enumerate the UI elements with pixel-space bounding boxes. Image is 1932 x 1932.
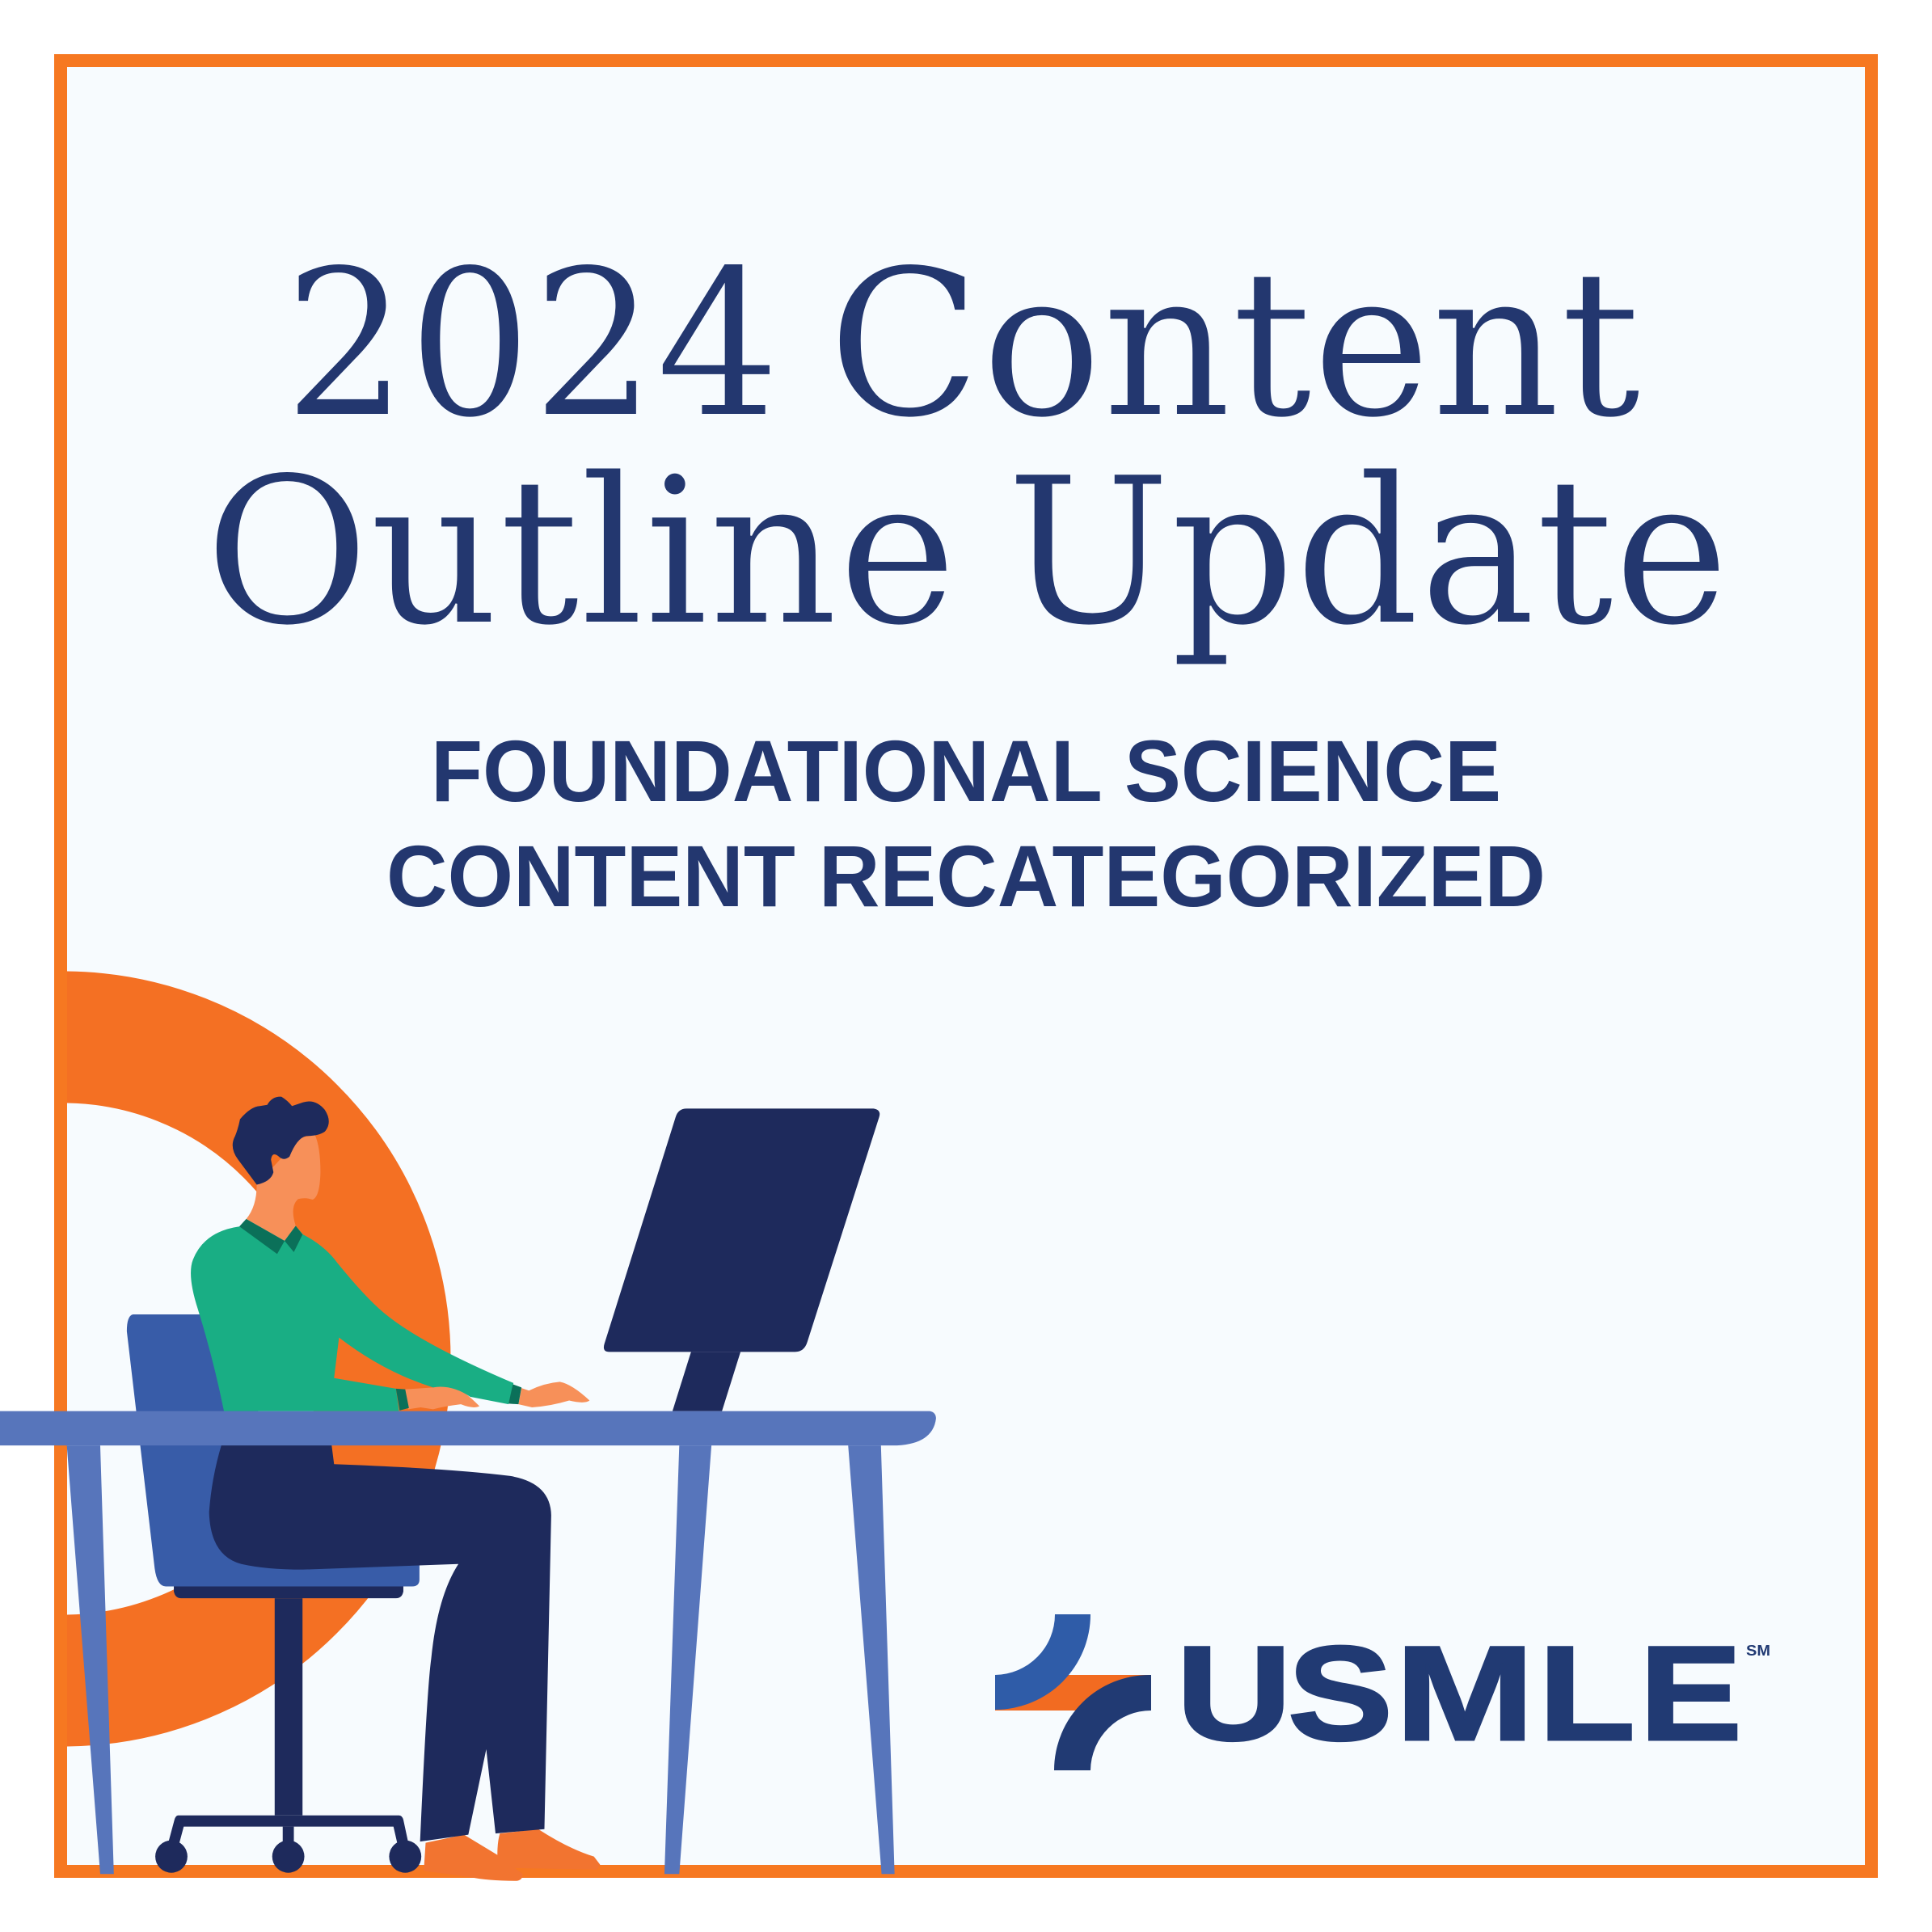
hair [233, 1097, 329, 1185]
hands [405, 1382, 589, 1409]
title [205, 226, 1729, 671]
title: 2024 [284, 226, 780, 463]
pants [209, 1445, 551, 1841]
face and neck [247, 1135, 320, 1241]
logo wordmark: U [1176, 1619, 1292, 1769]
logo wordmark: E [1639, 1619, 1742, 1769]
subtitle [386, 722, 1546, 925]
illustration: person at desk [0, 1097, 936, 1881]
chair [127, 1314, 421, 1873]
title: Content [828, 226, 1641, 463]
logo wordmark: M [1395, 1619, 1534, 1769]
subtitle: CONTENT RECATEGORIZED [386, 827, 1546, 925]
shirt [191, 1219, 513, 1411]
title: Outline [205, 434, 957, 671]
logo mark [995, 1614, 1151, 1770]
monitor [604, 1108, 880, 1411]
logo: USMLE [995, 1614, 1770, 1770]
shoes [424, 1829, 600, 1881]
subtitle: FOUNDATIONAL SCIENCE [431, 722, 1501, 820]
orange ring behind person [0, 1037, 385, 1681]
logo wordmark: L [1538, 1619, 1635, 1769]
service mark: SM [1746, 1643, 1770, 1659]
collar and cuffs [239, 1219, 521, 1411]
logo wordmark [1176, 1619, 1742, 1769]
desk [0, 1411, 936, 1874]
title: Update [1006, 434, 1729, 671]
logo wordmark: S [1288, 1619, 1393, 1769]
